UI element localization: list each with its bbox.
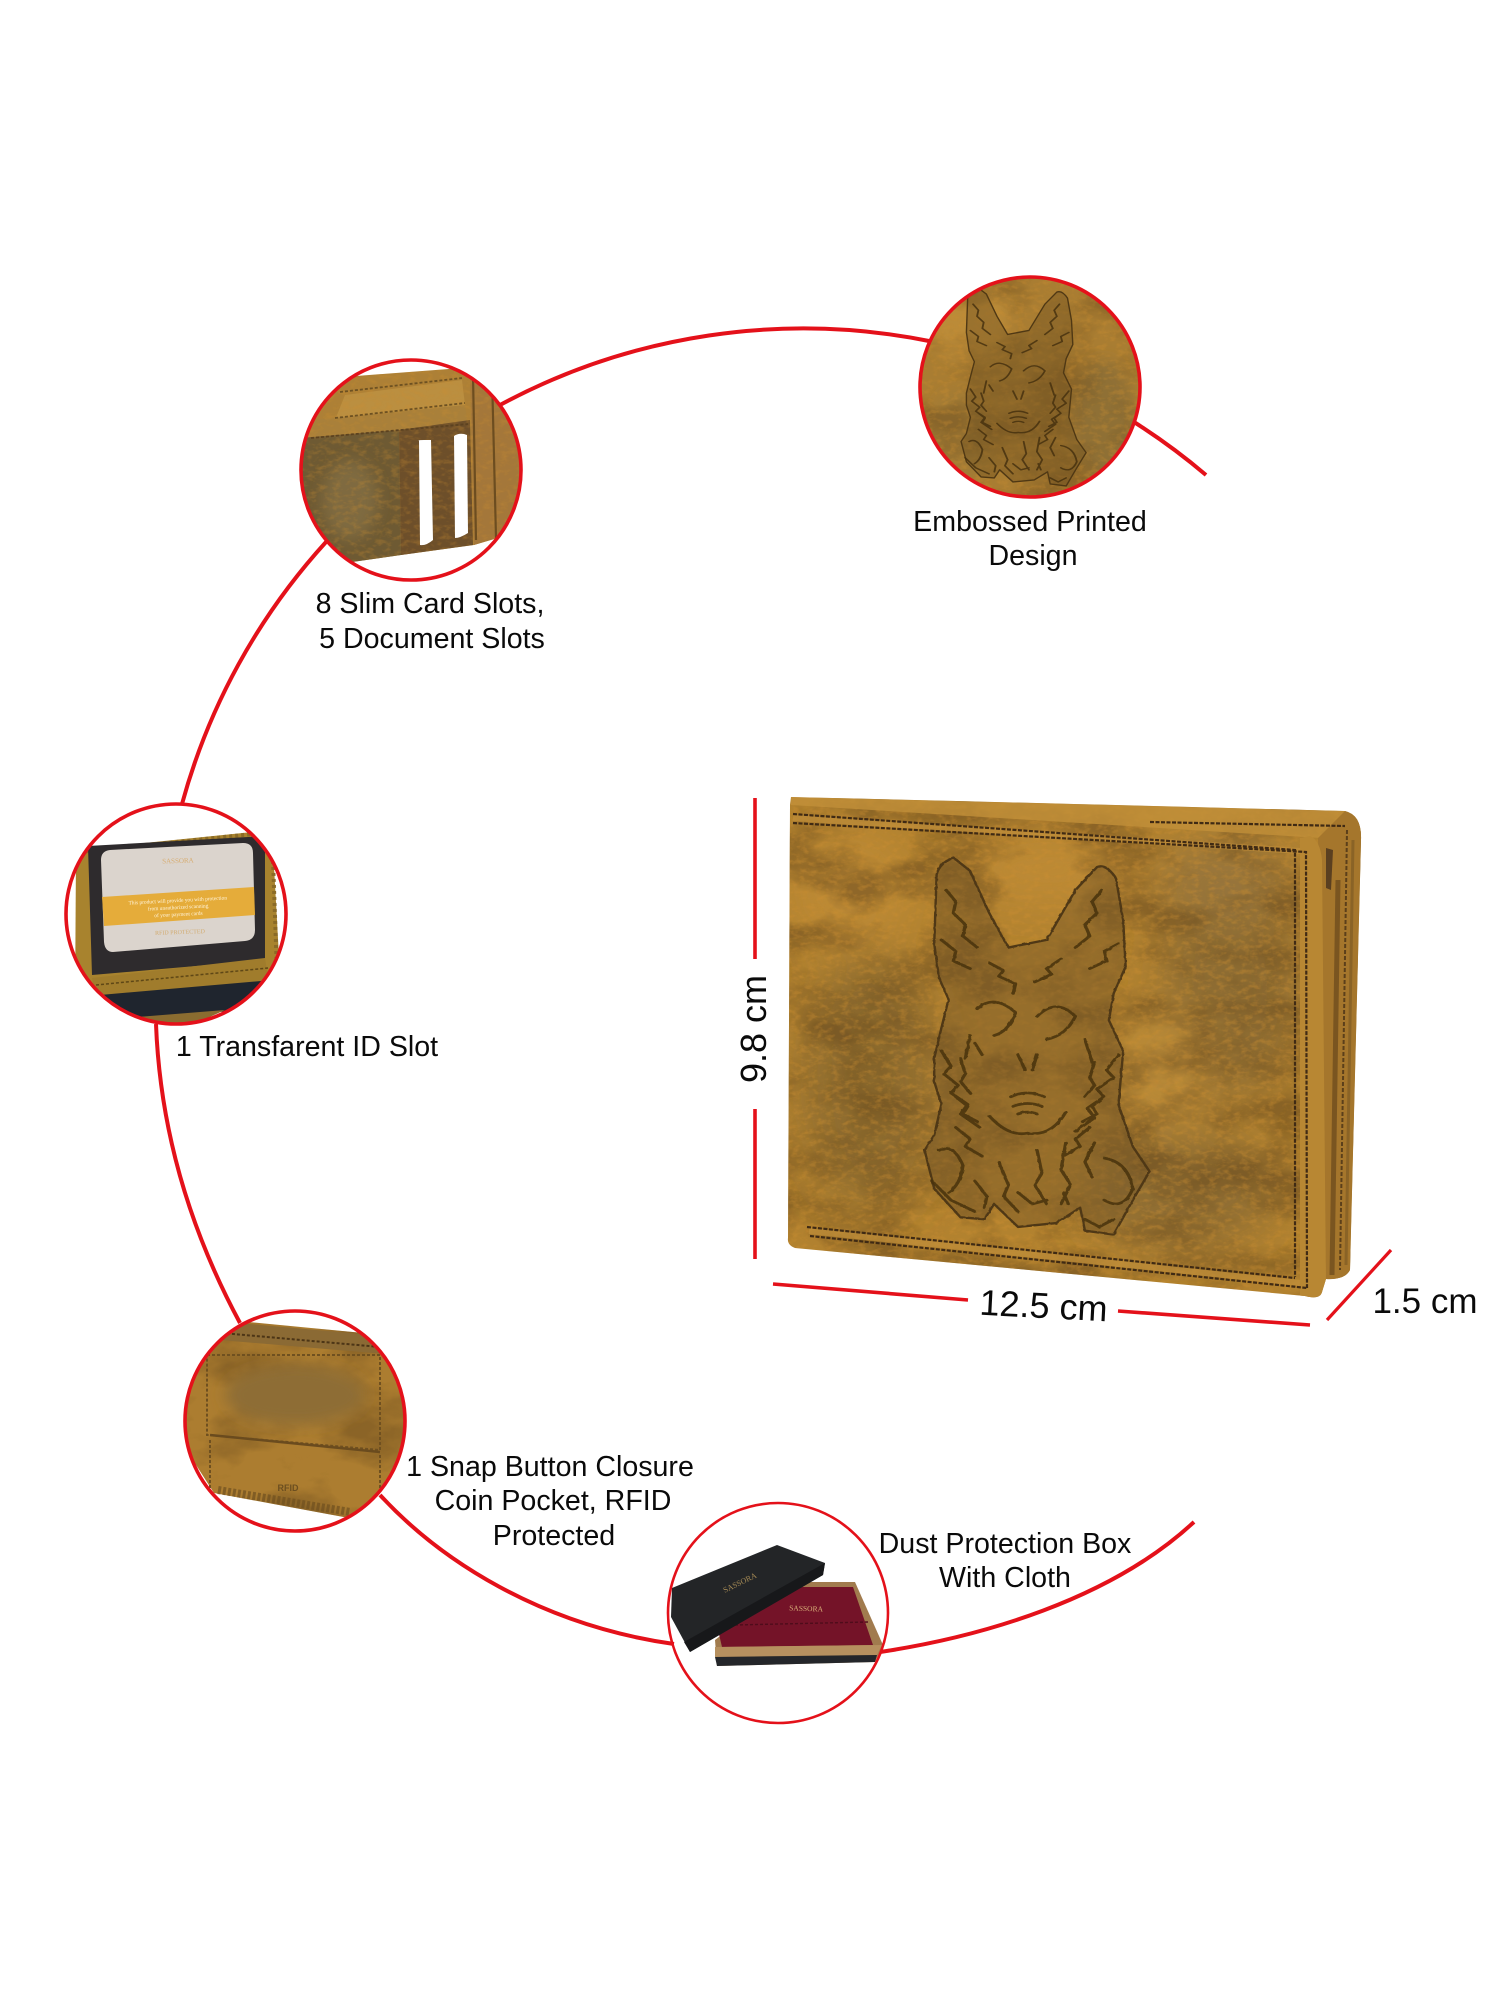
label: snap button coin pocket: 1 Snap Button Closure (406, 1451, 694, 1483)
panel: dust protection box: SASSORA (722, 1571, 758, 1595)
label: embossed printed design: Embossed Printed (913, 506, 1147, 538)
label: embossed printed design: Design (988, 540, 1078, 572)
embossed dog head (925, 858, 1150, 1235)
panel: card slots (300, 360, 525, 580)
panel: dust protection box (668, 1503, 888, 1723)
leather shading (790, 830, 1300, 1250)
box base (715, 1582, 883, 1666)
panel: transparent ID slot: from unauthorized scanning (148, 902, 209, 913)
label: dust protection box: Dust Protection Box (879, 1528, 1131, 1560)
panel: snap button coin pocket: RFID (278, 1483, 299, 1493)
label: snap button coin pocket: Coin Pocket, RFID (435, 1485, 671, 1517)
label: snap button coin pocket: Protected (493, 1520, 615, 1552)
label: transparent ID slot: 1 Transfarent ID Slot (176, 1031, 438, 1063)
panel: transparent ID slot: This product will provide you with protection (128, 895, 227, 907)
ID card (101, 843, 255, 952)
panel: transparent ID slot: RFID PROTECTED (155, 929, 206, 937)
panel: transparent ID slot: SASSORA (162, 856, 194, 866)
label: dust protection box: With Cloth (939, 1562, 1071, 1594)
wallet product photo (780, 790, 1370, 1310)
panel: embossed printed design (915, 275, 1145, 499)
label: card slots: 5 Document Slots (319, 623, 545, 655)
panel: transparent ID slot: of your payment cards (154, 910, 203, 919)
red connecting curve (156, 328, 1206, 1652)
dimension: depth 1.5 cm (1327, 1250, 1478, 1321)
dimension: height 9.8 cm: 9.8 cm (733, 975, 774, 1083)
top band (791, 797, 1362, 838)
dimension: width 12.5 cm: 12.5 cm (979, 1282, 1109, 1329)
panel: snap button coin pocket (180, 1310, 410, 1532)
right side gusset (1318, 811, 1361, 1279)
label: card slots: 8 Slim Card Slots, (316, 588, 544, 620)
dimension: depth 1.5 cm: 1.5 cm (1372, 1282, 1478, 1321)
wallet stitching (793, 814, 1345, 1288)
box lid (671, 1545, 825, 1652)
panel: transparent ID slot (66, 804, 286, 1026)
panel: dust protection box: SASSORA (789, 1603, 824, 1614)
dimension: width 12.5 cm (773, 1282, 1310, 1329)
